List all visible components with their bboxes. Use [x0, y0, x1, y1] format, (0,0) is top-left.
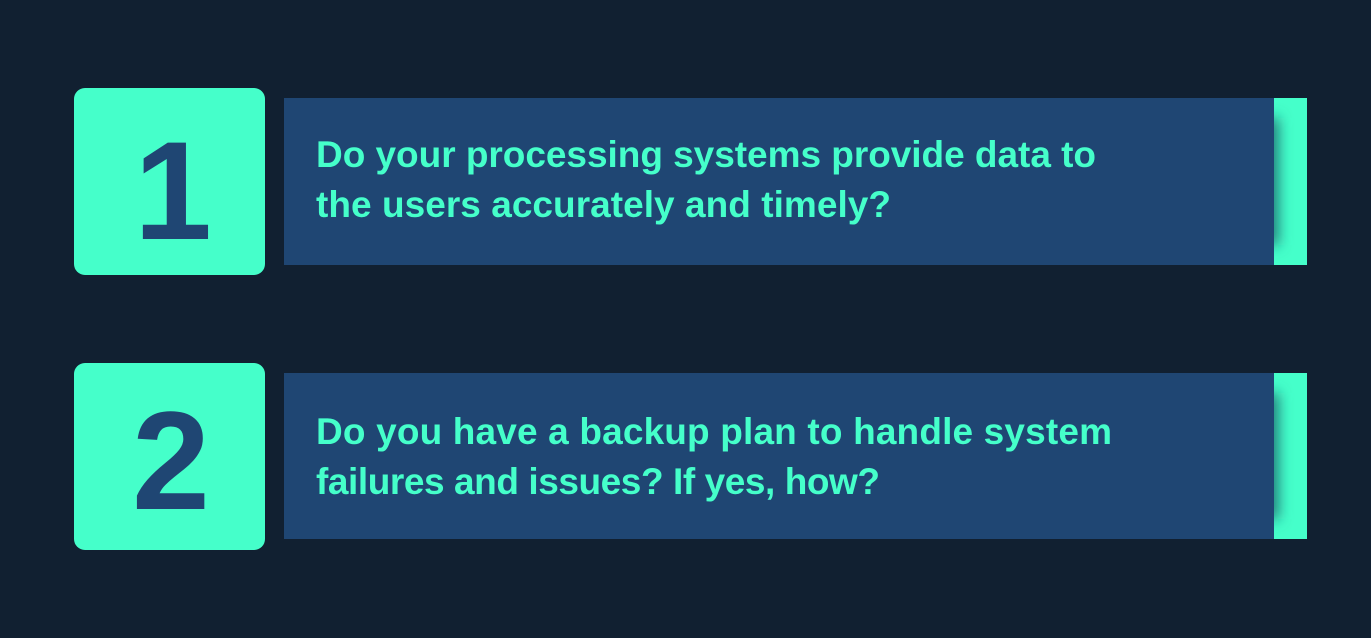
- number tile 1: [74, 88, 265, 275]
- number tile 2: 2: [132, 382, 210, 539]
- number tile 2: [74, 363, 265, 550]
- number tile 1: 1: [134, 112, 212, 269]
- question panel 2: [284, 373, 1307, 539]
- question panel 1: Do your processing systems provide data to: [316, 134, 1096, 175]
- item 1: [74, 88, 1307, 275]
- question panel 1: [284, 98, 1307, 265]
- question panel 2: failures and issues? If yes, how?: [316, 461, 880, 502]
- question panel 1: the users accurately and timely?: [316, 184, 891, 225]
- question panel 2: Do you have a backup plan to handle system: [316, 411, 1112, 452]
- item 2: [74, 363, 1307, 550]
